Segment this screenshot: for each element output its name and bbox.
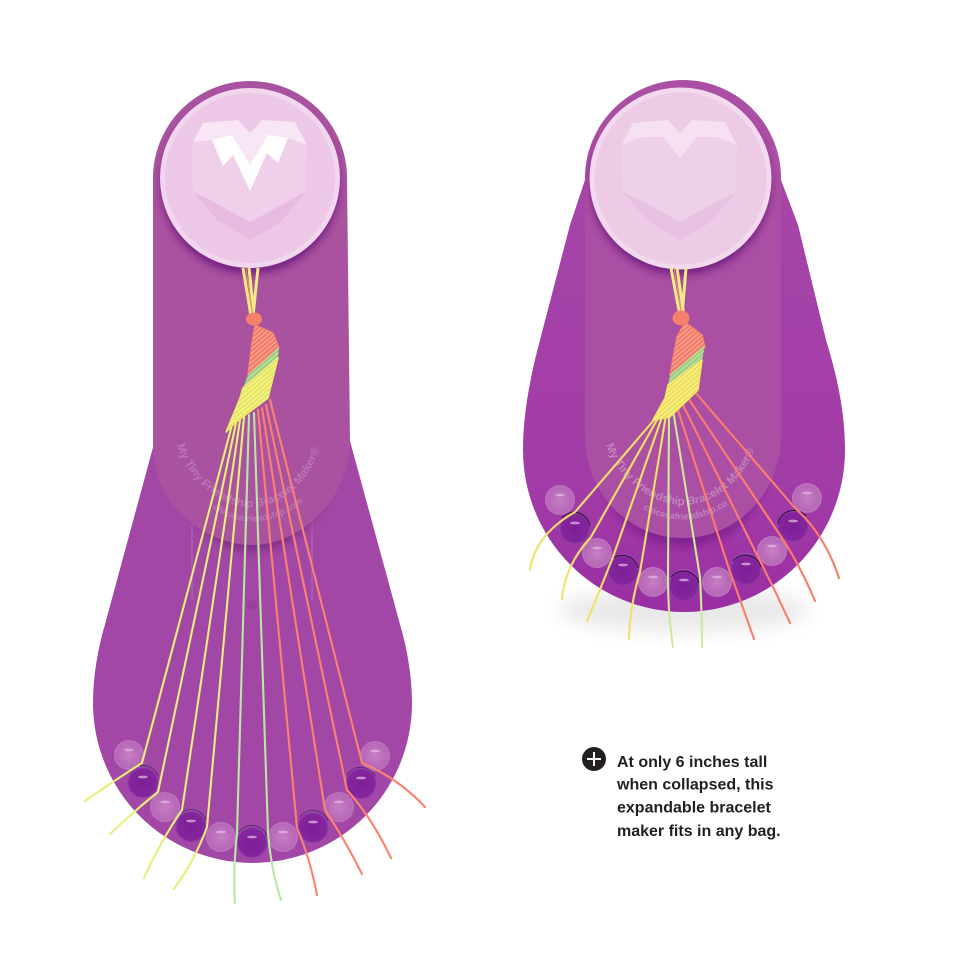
left base plate	[93, 430, 412, 863]
left slider shadow	[170, 470, 335, 552]
callout text: maker fits in any bag.	[617, 823, 781, 840]
right heart knob	[590, 88, 772, 270]
right base ground shadow	[559, 588, 809, 632]
left bracelet maker, expanded	[84, 81, 426, 904]
right threads	[530, 392, 839, 647]
left braided bracelet	[226, 268, 279, 432]
callout text: At only 6 inches tall	[617, 754, 767, 771]
callout	[582, 747, 781, 840]
left engraved brand text: My Tiny Friendship Bracelet Maker®	[177, 443, 318, 510]
left slider arm	[153, 81, 350, 545]
right base plate	[523, 180, 845, 612]
right knob shadow	[590, 95, 770, 275]
right slider shadow	[600, 480, 768, 547]
left knob shadow	[161, 96, 339, 274]
icon: plus in circle	[582, 747, 606, 771]
callout text	[616, 754, 781, 840]
right bracelet maker, collapsed	[523, 80, 845, 648]
left bead pegs	[114, 740, 390, 858]
right engraved brand text: My Tiny Friendship Bracelet Maker®	[606, 442, 753, 508]
callout text: expandable bracelet	[617, 800, 772, 816]
callout text: when collapsed, this	[616, 776, 774, 794]
right bead pegs	[545, 483, 822, 601]
right braided bracelet	[653, 268, 705, 420]
right slider arm	[585, 80, 781, 538]
left heart knob	[160, 88, 340, 268]
right engraved brand text: chicasafriendship.com	[644, 502, 727, 520]
left threads	[85, 400, 425, 903]
left engraved brand text: chicasafriendship.com	[214, 499, 303, 522]
